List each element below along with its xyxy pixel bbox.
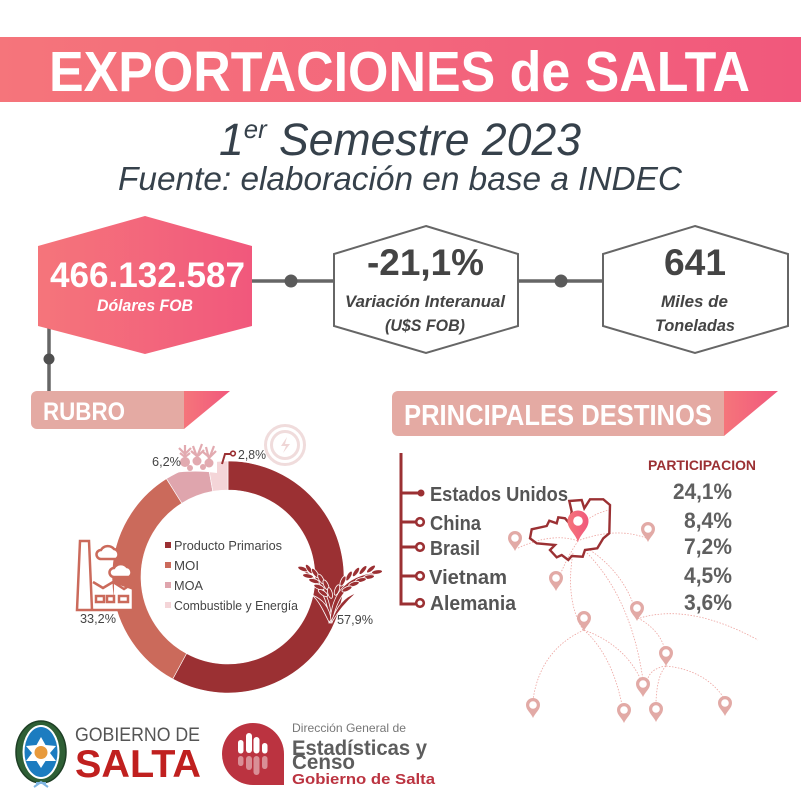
participation values: 24,1% [673,479,732,504]
segment: MOI 33,2% [112,479,187,679]
donut percent labels: 2,8% [238,447,266,462]
logo text: estadisticas y censo: Dirección General de [292,721,406,735]
participation values: 7,2% [684,534,732,559]
subtitle: period: er [244,114,268,144]
heading: principales destinos [392,391,778,436]
kpi: total FOB: 466.132.587 [50,256,245,295]
participation values: 4,5% [684,563,732,588]
logo: estadisticas teardrop [222,723,284,785]
connector node [231,451,235,456]
donut legend [165,539,298,613]
participation header: PARTICIPACION [648,457,756,473]
heading: rubro: RUBRO [43,398,125,426]
kpi: total FOB [38,216,252,354]
donut percent labels: 57,9% [337,612,373,627]
destinations bracket [401,453,424,607]
title banner: EXPORTACIONES de SALTA [49,40,750,104]
destination names: Vietnam [429,567,507,589]
destination names [429,484,568,615]
donut legend: MOI [174,559,199,573]
segment: combustible 2,8% [208,461,228,491]
heading: rubro [31,391,230,429]
kpi: tonnes: Toneladas [655,316,735,335]
logo text: gobierno de salta: GOBIERNO DE [75,725,200,746]
participation values: 8,4% [684,508,732,533]
donut percent labels [80,447,373,627]
icon: connector for energy [222,454,232,464]
logo text: estadisticas y censo: Censo [292,751,355,774]
destination pins [508,522,732,723]
salta province outline [530,499,610,560]
participation values [673,479,732,615]
subtitle: source: Fuente: elaboración en base a INDEC [118,160,683,197]
icon: energy [266,426,304,464]
icon: agro plants [172,444,217,473]
donut percent labels: 6,2% [152,454,181,469]
donut chart [112,461,344,693]
icon: wheat [297,563,383,623]
heading: principales destinos: PRINCIPALES DESTINOS [404,400,712,432]
connector lines [44,274,603,392]
destination names: Estados Unidos [430,484,568,506]
icon: factory [77,541,133,610]
logo text: estadisticas y censo: Estadísticas y [292,737,427,760]
logo text: estadisticas y censo: Gobierno de Salta [292,771,436,788]
destination names: China [430,513,482,535]
kpi: interannual variation: -21,1% [367,242,484,283]
kpi: total FOB: Dólares FOB [97,296,193,315]
destination names: Alemania [430,593,517,615]
subtitle: period: Semestre 2023 [267,114,581,165]
kpi: tonnes [603,226,788,353]
kpi: tonnes: Miles de [661,292,728,311]
participation values: 3,6% [684,590,732,615]
segment: MOA 6,2% [166,463,213,503]
kpi: tonnes: 641 [664,242,726,283]
segment: productos primarios 57,9% [173,461,344,693]
logo text: estadisticas y censo [292,721,436,788]
kpi: interannual variation: Variación Interanual [345,292,506,311]
route map arcs [518,510,758,705]
subtitle: period: 1 [219,114,244,165]
donut legend: MOA [174,579,204,593]
donut percent labels: 33,2% [80,611,116,626]
donut legend: Combustible y Energía [174,599,298,613]
logo text: gobierno de salta: SALTA [75,743,201,786]
kpi: interannual variation: (U$S FOB) [385,316,465,335]
donut legend: Producto Primarios [174,539,282,553]
logo: coat of arms [16,721,66,787]
logo text: gobierno de salta [75,725,201,786]
destination names: Brasil [430,538,480,560]
kpi: interannual variation [334,226,518,353]
main pin: Salta [568,510,588,542]
